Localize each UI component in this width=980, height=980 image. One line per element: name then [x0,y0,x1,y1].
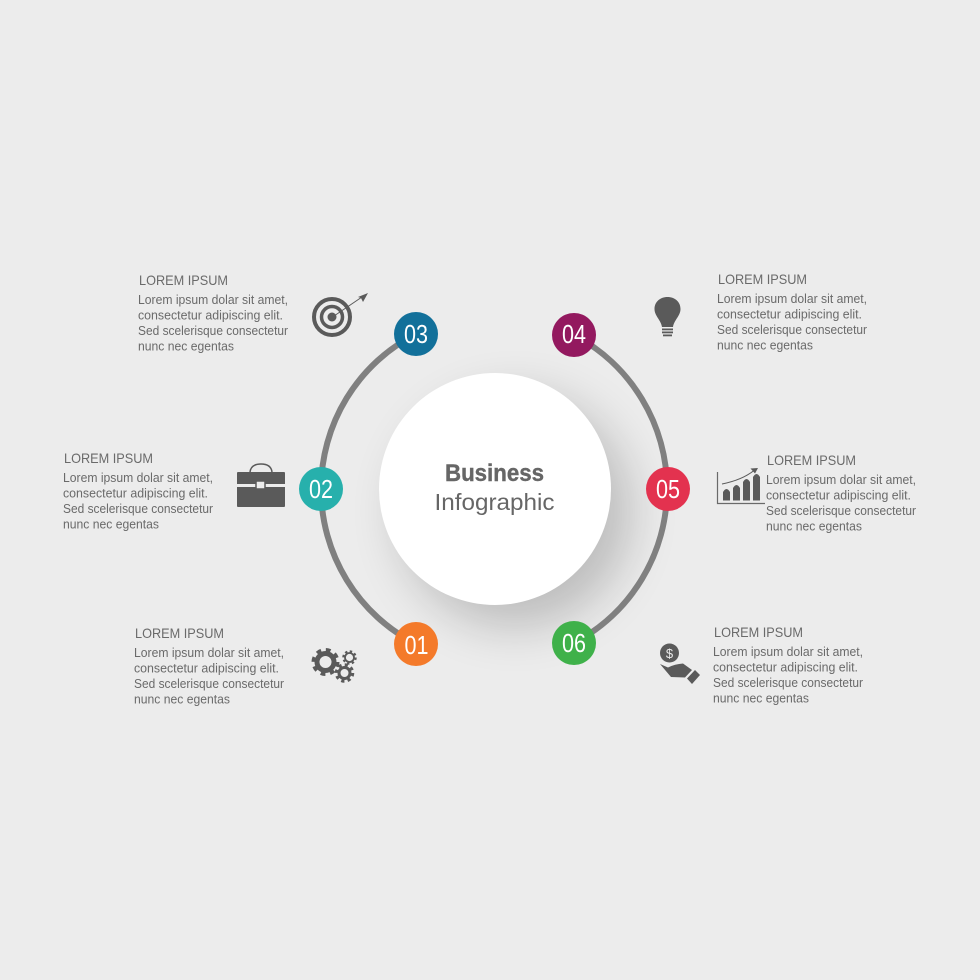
badge 01 [394,622,438,666]
badge 03: 03 [404,321,428,349]
icon: hand with coin [660,644,700,684]
icon: hand with coin: $ [666,646,674,661]
badge 02: 02 [309,476,333,504]
icon: target [314,293,368,335]
center title [434,460,555,515]
left arc [321,334,416,644]
badge 01: 01 [404,632,428,660]
text block 03 [138,272,288,354]
text block 01 [134,625,284,706]
center title: Infographic [434,489,555,515]
badge 05 [646,467,690,511]
badge 06: 06 [562,630,586,658]
text block 05 [766,452,916,534]
icon: gears [314,650,356,681]
text block 06 [713,624,863,706]
center circle shadow [399,395,631,627]
icon: briefcase [237,464,285,507]
badge 05: 05 [656,476,680,504]
text block 02 [63,450,213,532]
icon: light bulb [654,297,680,336]
badge 06 [552,621,596,665]
badge 02 [299,467,343,511]
center circle [379,373,611,605]
center title: Business [445,460,544,487]
badge 04 [552,313,596,357]
icon: growth chart [718,468,765,504]
badge 03 [394,312,438,356]
badge 04: 04 [562,321,586,349]
text block 04 [717,271,867,352]
right arc [574,335,667,643]
